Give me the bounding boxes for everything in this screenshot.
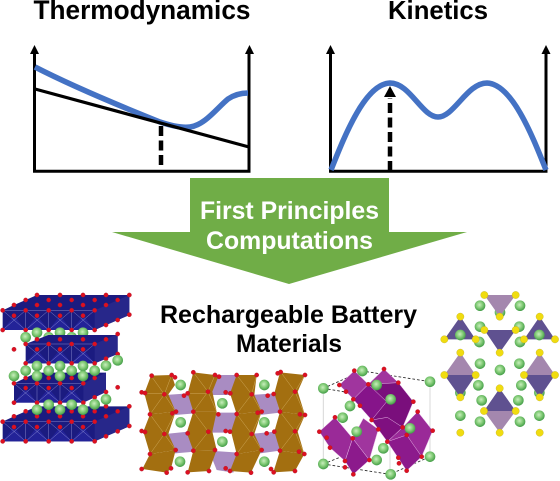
pale octahedra edges (145, 372, 305, 454)
layer 3 (12, 373, 120, 405)
red oxygen atoms (139, 370, 307, 475)
yellow anions (441, 291, 559, 436)
arrow label: First Principles Computations: Computations (206, 227, 373, 255)
arrow label: First Principles Computations: First Principles (200, 197, 379, 225)
green lithium spheres (175, 380, 270, 467)
crystal structure: magenta spinel cell (317, 366, 435, 480)
layer 1 (0, 293, 131, 332)
layer 4 (0, 404, 131, 443)
blue energy curve (35, 67, 248, 127)
layer 2 (12, 332, 120, 365)
green down arrow (112, 178, 467, 284)
chart: thermodynamics free energy curve (30, 45, 254, 171)
lithium row lower (32, 394, 111, 415)
magenta octahedra (319, 369, 433, 474)
heading: Rechargeable Battery Materials (160, 301, 417, 358)
arrow label: First Principles Computations (200, 197, 379, 255)
crystal structure: brown and lilac polyanion (139, 370, 307, 475)
dashed arrow to barrier peak (384, 86, 396, 171)
brown octahedra columns (142, 372, 305, 473)
lithium row upper (20, 327, 88, 343)
chart: kinetics energy barrier curve (326, 45, 550, 171)
dashed composition marker (159, 126, 163, 169)
heading: Rechargeable Battery Materials: Materials (236, 330, 342, 358)
blue barrier curve (331, 83, 546, 170)
purple tetrahedra (444, 295, 555, 433)
common tangent line (35, 89, 249, 147)
green lithium spheres (318, 366, 435, 480)
red oxygen atoms (317, 367, 435, 476)
axes (326, 45, 550, 171)
axes (30, 45, 254, 171)
green lithium spheres in front (455, 330, 545, 340)
green lithium spheres behind (455, 300, 545, 427)
crystal structure: layered blue oxide (0, 293, 131, 443)
crystal structure: purple tetrahedra with yellow anions (441, 291, 559, 436)
heading: Rechargeable Battery Materials: Rechargeable Battery (160, 301, 417, 329)
lithium row middle (9, 355, 123, 381)
lilac tetrahedra (165, 375, 280, 473)
unit cell edges (323, 371, 430, 474)
